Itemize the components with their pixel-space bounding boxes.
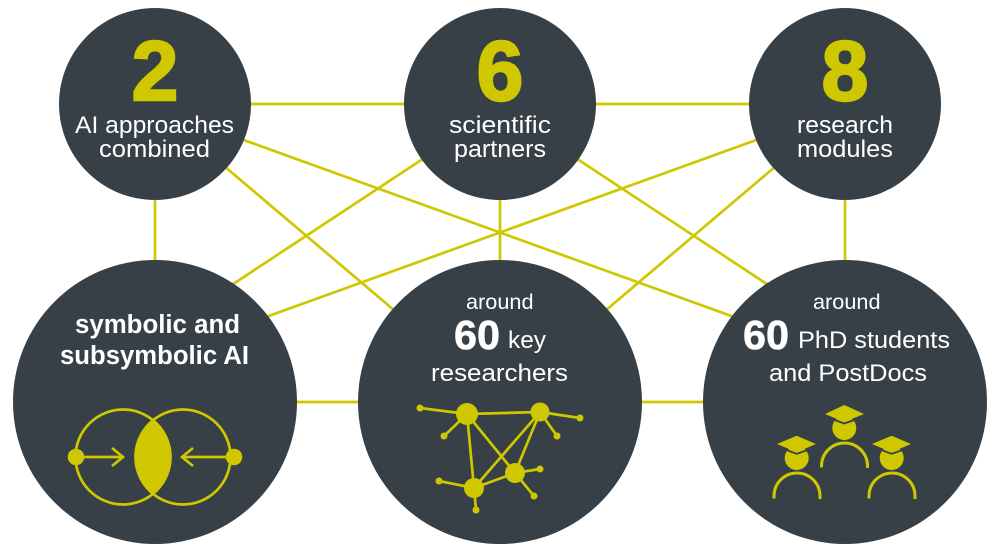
- panel: around 60 key researchers: [358, 260, 642, 544]
- label: symbolic and: symbolic and: [75, 311, 240, 339]
- label: scientific: scientific: [449, 112, 551, 139]
- label: 60: 60: [454, 312, 500, 358]
- label: 60: 60: [743, 312, 789, 358]
- label: PhD students: PhD students: [798, 327, 950, 354]
- label: researchers: researchers: [431, 360, 568, 387]
- label: subsymbolic AI: subsymbolic AI: [60, 342, 249, 370]
- panel: symbolic and subsymbolic AI: [13, 260, 297, 544]
- number 8: 8: [822, 24, 868, 118]
- label: partners: partners: [454, 136, 546, 163]
- label: key: key: [508, 327, 547, 354]
- icon: graduate centre: [822, 405, 868, 468]
- label: modules: modules: [797, 136, 893, 163]
- panel: 8 research modules: [749, 8, 941, 200]
- label: combined: combined: [99, 136, 210, 163]
- panel: 2 AI approaches combined: [59, 8, 251, 200]
- label: around: around: [813, 290, 880, 314]
- panel: 6 scientific partners: [404, 8, 596, 200]
- label: AI approaches: AI approaches: [75, 112, 234, 139]
- label: around: around: [466, 290, 534, 314]
- label: and PostDocs: and PostDocs: [769, 360, 927, 387]
- icon: merging circles: [68, 410, 242, 504]
- icon: graduate left: [774, 436, 820, 499]
- label: research: research: [797, 112, 893, 139]
- icon: graduate right: [869, 436, 915, 499]
- panel: around 60 PhD students and PostDocs: [703, 260, 987, 544]
- icon: researcher network: [416, 402, 584, 514]
- number 2: 2: [132, 24, 178, 118]
- number 6: 6: [477, 24, 523, 118]
- icon: graduates: [774, 405, 915, 499]
